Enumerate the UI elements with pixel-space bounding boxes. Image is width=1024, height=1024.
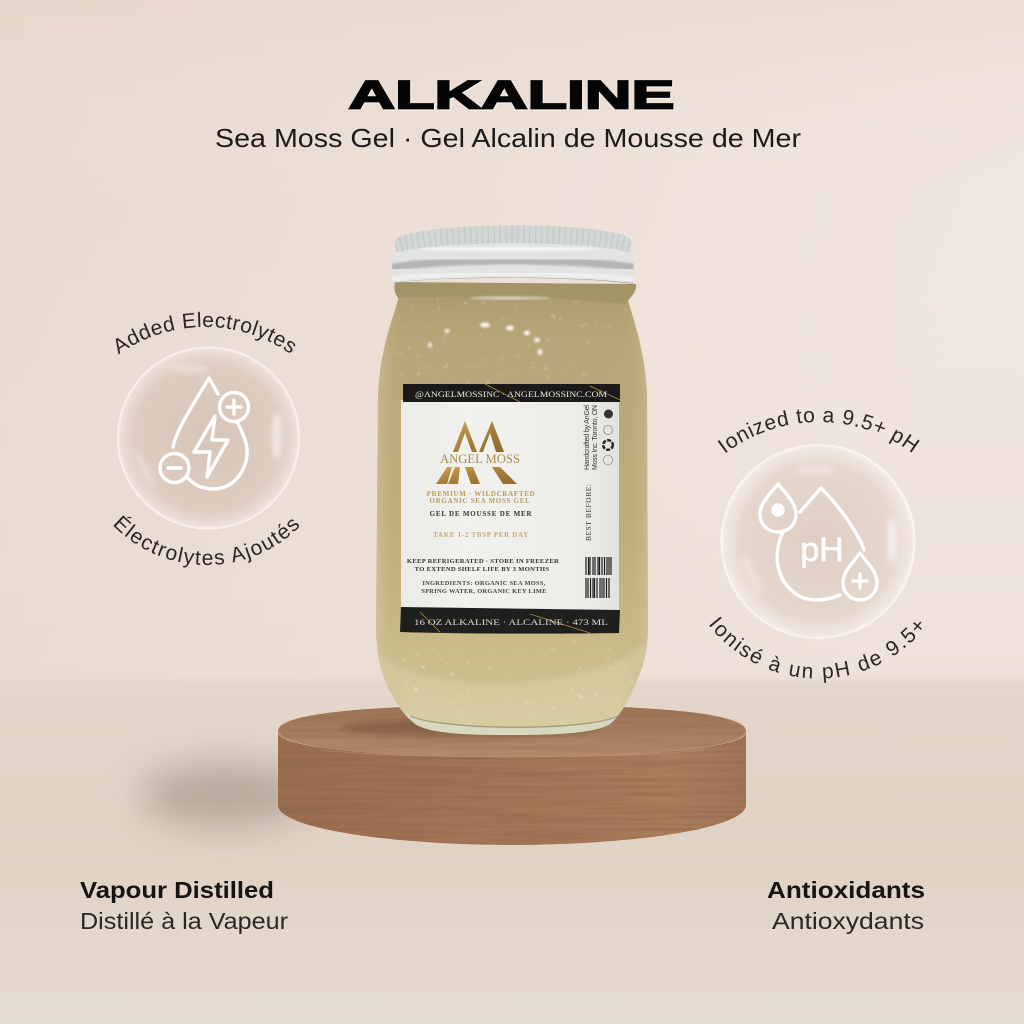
feature: vapour distilled [80, 877, 288, 934]
jar [370, 220, 655, 740]
pedestal edge highlight [320, 750, 704, 757]
subtitle: Sea Moss Gel · Gel Alcalin de Mousse de Mer [215, 123, 801, 153]
table surface [0, 675, 1024, 1024]
curved label: english: Added Electrolytes [116, 312, 296, 354]
pedestal side [278, 725, 746, 850]
callout: ionized ph [709, 410, 922, 683]
curved label: english: Ionized to a 9.5+ pH [718, 410, 920, 453]
table shadow [140, 763, 310, 827]
logo [436, 421, 520, 484]
label side text: Moss Inc. Toronto, ON [592, 405, 599, 470]
icon text: ph: pH [800, 531, 844, 569]
label product text: INGREDIENTS: ORGANIC SEA MOSS, [422, 580, 546, 587]
english heading: Antioxidants [767, 877, 925, 903]
curved label: french: Ionisé à un pH de 9.5+ [709, 616, 922, 683]
label top strip: @ANGELMOSSINC · ANGELMOSSINC.COM [415, 390, 608, 399]
title: ALKALINE [348, 74, 674, 118]
label product text: TAKE 1-2 TBSP PER DAY [433, 531, 529, 539]
background wall [0, 0, 1024, 700]
label side text [584, 405, 599, 541]
lid [392, 225, 634, 284]
icon: drop with bolt and plus minus [160, 378, 248, 489]
icon: ph drops [760, 484, 877, 600]
label product text: KEEP REFRIGERATED · STORE IN FREEZER [407, 558, 559, 565]
glass highlights [428, 296, 550, 355]
label side text: BEST BEFORE: [584, 484, 593, 541]
label product text: SPRING WATER, ORGANIC KEY LIME [421, 588, 547, 595]
label bottom strip: 16 OZ ALKALINE · ALCALINE · 473 ML [414, 618, 608, 627]
french text: Antioxydants [772, 908, 924, 934]
logo: ANGEL MOSS [440, 451, 520, 466]
label product text: PREMIUM · WILDCRAFTED [427, 490, 535, 498]
jar body with gel [370, 285, 655, 740]
pedestal top [278, 705, 746, 757]
label product text: TO EXTEND SHELF LIFE BY 3 MONTHS [415, 566, 549, 573]
label bottom strip [400, 607, 620, 634]
barcode [586, 557, 611, 598]
french text: Distillé à la Vapeur [80, 908, 288, 934]
label paper [401, 400, 619, 612]
wooden pedestal [278, 705, 746, 850]
english heading: Vapour Distilled [80, 877, 274, 903]
label product text: GEL DE MOUSSE DE MER [430, 510, 533, 518]
feature: antioxidants [767, 877, 925, 934]
label side text: Handcrafted by AnGel [584, 405, 591, 470]
jar neck [394, 282, 636, 304]
label icons [603, 410, 613, 465]
curved label: french: Électrolytes Ajoutés [113, 515, 299, 568]
label product text [407, 490, 559, 595]
product label [400, 384, 620, 634]
bubble [117, 346, 300, 530]
label top strip [403, 384, 620, 402]
callout: added electrolytes [113, 312, 300, 568]
label product text: ORGANIC SEA MOSS GEL [430, 497, 530, 505]
bubble [720, 444, 916, 639]
